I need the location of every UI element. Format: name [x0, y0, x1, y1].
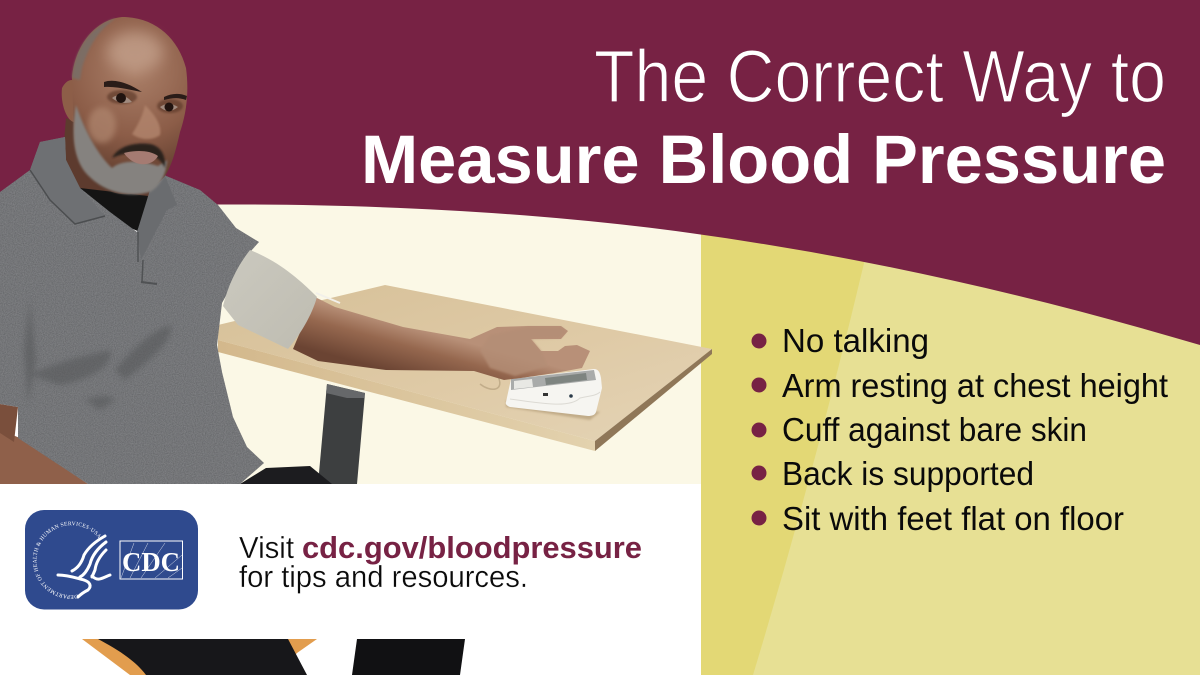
item: cuff: Cuff against bare skin [782, 411, 1087, 448]
item: no talking: No talking [782, 322, 929, 359]
hair stubble [72, 18, 116, 80]
shirt folds [24, 300, 171, 410]
table top [218, 285, 712, 451]
beard [74, 105, 167, 194]
right trouser leg [352, 639, 465, 675]
panel: yellow checklist background [701, 225, 1200, 675]
HHS seal ring text: DEPARTMENT OF HEALTH & HUMAN SERVICES·USA [32, 522, 100, 599]
forehead highlight [107, 32, 163, 72]
website callout [239, 530, 642, 594]
blood pressure cuff [223, 250, 317, 349]
photo: man [0, 17, 590, 484]
item: feet: Sit with feet flat on floor [782, 500, 1124, 537]
photo: lower legs and chair [82, 639, 465, 675]
CDC wordmark: CDC [122, 547, 180, 577]
blood pressure monitor [480, 369, 602, 420]
nose [132, 105, 160, 139]
trousers at seat [240, 466, 332, 484]
photo: table with monitor [218, 285, 712, 484]
brows and eyes [104, 81, 187, 113]
panel: cream photo backdrop [200, 200, 701, 484]
blood pressure cuff tube [316, 293, 340, 303]
undershirt [80, 188, 148, 232]
tips line: for tips and resources. [239, 559, 528, 594]
title [361, 35, 1166, 198]
grey polo shirt [0, 137, 264, 484]
near forearm [0, 430, 88, 484]
head [72, 17, 187, 194]
checklist [752, 322, 1168, 537]
logo background [25, 510, 198, 610]
ear [62, 80, 79, 122]
cheek highlight [88, 107, 116, 143]
item: arm resting: Arm resting at chest height [782, 367, 1168, 404]
neck [62, 118, 172, 205]
url: cdc.gov/bloodpressure [302, 530, 642, 565]
arm and hand [293, 297, 590, 380]
CDC box [120, 541, 182, 579]
shirt collar [30, 137, 177, 284]
mustache and mouth [112, 144, 165, 168]
item: back: Back is supported [782, 455, 1034, 492]
panel: maroon header with curved edge [0, 0, 1200, 345]
upper arm skin [0, 404, 18, 442]
table leg [318, 384, 365, 484]
chair seat [82, 639, 317, 675]
CDC HHS logo [25, 510, 198, 610]
visit line: Visit [239, 530, 294, 565]
title line 2: Measure Blood Pressure [361, 121, 1166, 198]
left trouser leg [98, 639, 307, 675]
HHS eagle [58, 536, 110, 597]
